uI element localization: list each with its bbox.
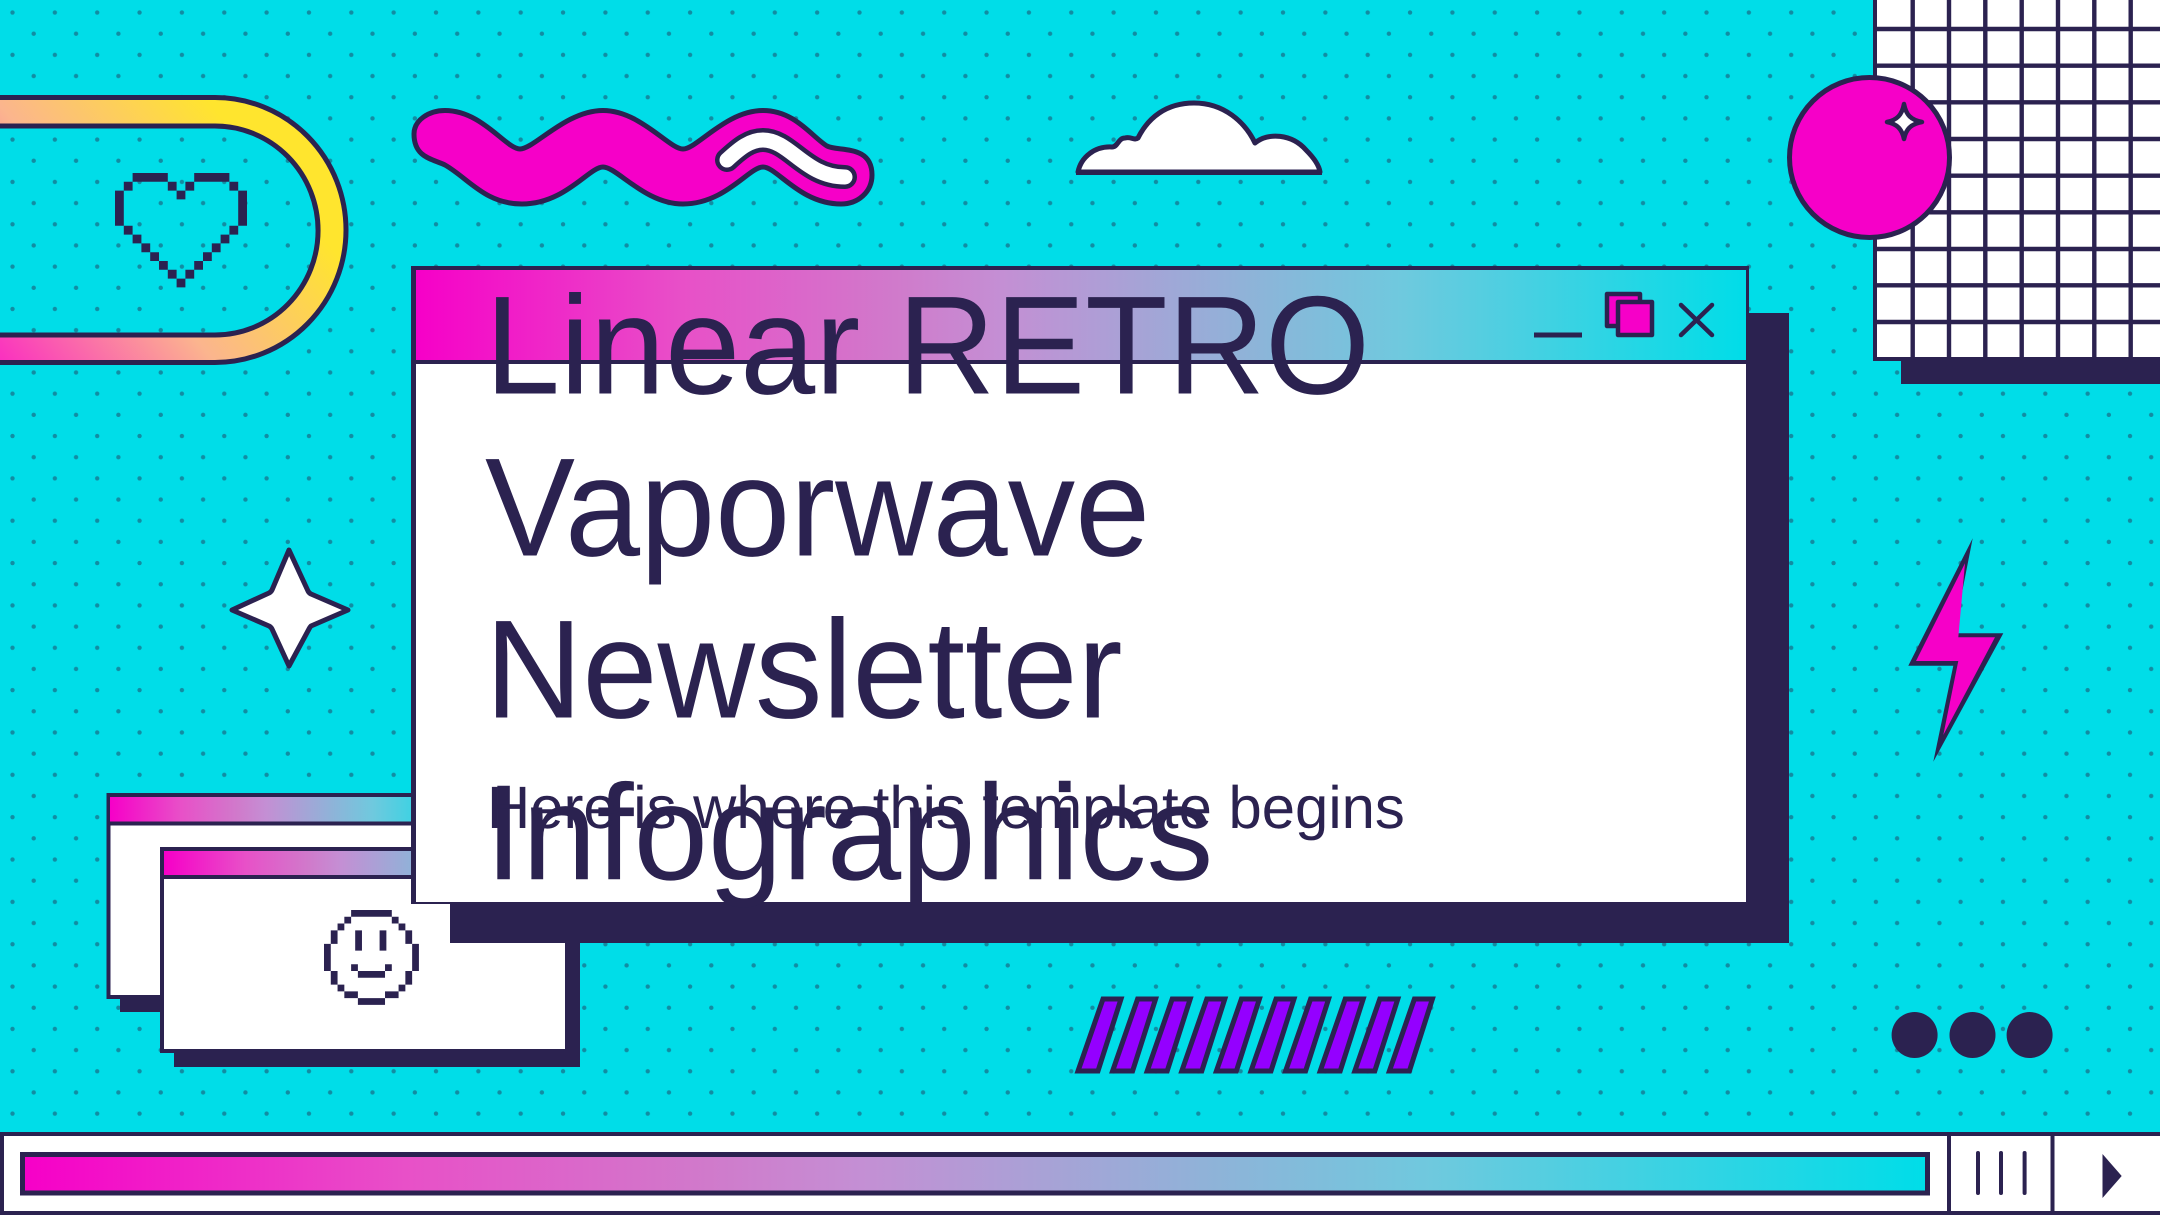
main window: [411, 266, 1789, 943]
window body: [411, 266, 1749, 904]
icon: lightning bolt: [1908, 538, 2003, 762]
bottom progress bar: [2, 1134, 2160, 1213]
icon: four-point star: [232, 550, 348, 666]
icon: cloud: [1076, 103, 1322, 175]
magenta squiggle: [414, 110, 872, 204]
title: [485, 266, 1370, 908]
purple slanted stripes: [1078, 999, 1432, 1071]
three dots: [1892, 1012, 2053, 1058]
title: Vaporwave: [485, 428, 1150, 586]
title: Newsletter: [485, 590, 1123, 748]
title: Linear RETRO: [485, 266, 1370, 424]
icon: restore squares: [1607, 294, 1652, 335]
title: Infographics: [485, 756, 1213, 908]
front small window with smiley: [160, 847, 580, 1067]
grid panel with shadow: [1875, 0, 2160, 384]
subtitle: Here is where this template begins: [487, 774, 1405, 841]
icon: grip lines: [1978, 1153, 2025, 1193]
progress fill: [22, 1154, 1928, 1193]
magenta circle with sparkle: [1790, 78, 1950, 238]
title bar: [416, 270, 1746, 360]
icon: close: [1681, 305, 1712, 335]
icon: pixel smiley: [324, 910, 419, 1005]
icon: pixel heart: [115, 173, 247, 287]
window shadow: [450, 313, 1789, 943]
gradient pill outline: [0, 98, 346, 362]
icon: play arrow: [2102, 1154, 2122, 1198]
icon: minimize: [1534, 332, 1582, 338]
back small window: [108, 795, 508, 1012]
